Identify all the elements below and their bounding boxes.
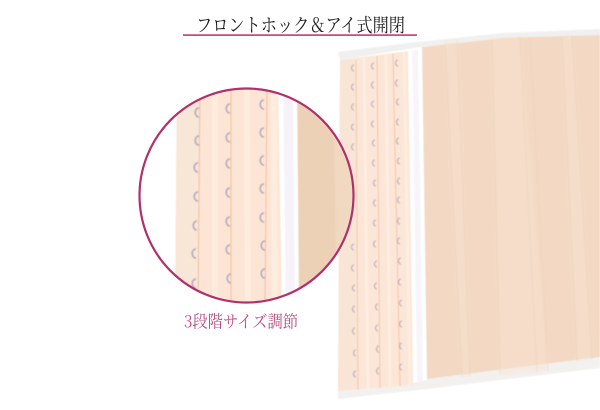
magnified hooks column 3 — [260, 100, 265, 278]
hook panel folds — [364, 52, 410, 389]
hook column 1 — [352, 65, 356, 377]
corset product photo — [338, 29, 600, 399]
magnified panel shaded edge — [175, 80, 200, 310]
hook column 3 — [396, 60, 402, 370]
main panel seams — [445, 35, 592, 377]
magnified hooks column 2 — [226, 104, 231, 283]
magnified white strip — [278, 94, 282, 256]
main eye panel — [422, 35, 600, 379]
magnified strip center shading — [284, 96, 294, 294]
magnified stitching — [198, 85, 267, 310]
magnified tan panel — [296, 102, 352, 288]
strip center shading — [412, 49, 423, 382]
bottom binding — [338, 357, 600, 399]
hook column 2 — [372, 63, 379, 374]
magnifier circle — [140, 80, 360, 310]
magnified contents — [174, 90, 352, 302]
magnified tan pleat — [334, 138, 352, 250]
magnified hooks column 1 — [192, 108, 199, 288]
title underline — [183, 34, 417, 36]
magnified folds — [215, 85, 275, 310]
top binding — [338, 29, 600, 60]
magnified hook panel — [200, 90, 282, 302]
caption: 3段階サイズ調節 — [184, 308, 298, 332]
title: フロントホック＆アイ式開閉 — [196, 10, 405, 38]
hook panel shaded edge — [338, 58, 358, 391]
main panel pleats — [445, 35, 592, 377]
circle ring — [140, 88, 354, 302]
hook panel stitching — [356, 54, 400, 390]
hook panel — [338, 51, 414, 391]
white center strip — [408, 48, 427, 383]
